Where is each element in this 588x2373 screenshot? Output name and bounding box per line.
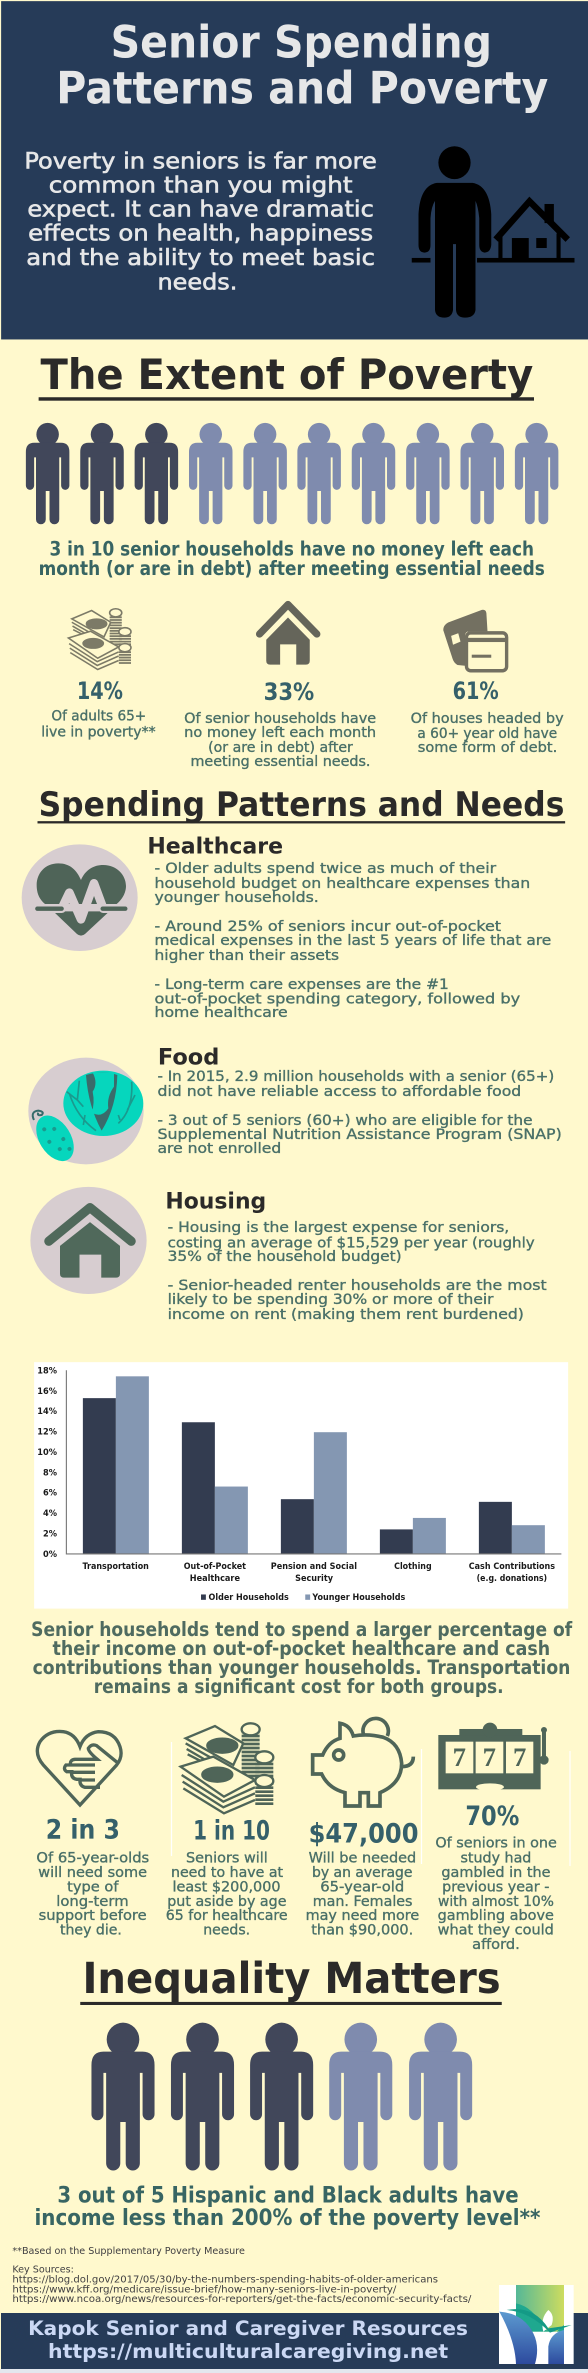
text: food: did not have reliable access to affordable food: [157, 1084, 521, 1100]
stat: $47,000: man. Females: [313, 1894, 413, 1910]
icon: money and coins: [181, 1723, 273, 1813]
panel: inequality matters: [12, 1954, 541, 2305]
stat: 2 in 3: long-term: [56, 1894, 129, 1910]
legend: [201, 1592, 405, 1602]
icon: slot machine: 7: [513, 1742, 526, 1772]
caption: 3 in 10: [39, 537, 545, 580]
icon: house in circle: [30, 1187, 147, 1294]
footnote and sources: Key Sources:: [12, 2265, 74, 2276]
legend: Older Households: [208, 1592, 289, 1602]
y axis labels: 16%: [37, 1386, 58, 1396]
text: food: are not enrolled: [157, 1141, 281, 1157]
stat: 61%: some form of debt.: [418, 740, 557, 756]
intro text: effects on health, happiness: [28, 222, 373, 247]
stat: 2 in 3: support before: [39, 1908, 147, 1924]
stat: 14%: [41, 677, 156, 741]
x axis labels: Out-of-Pocket: [184, 1561, 246, 1571]
stat: 70%: gambling above: [438, 1908, 554, 1924]
stat: 70%: [435, 1801, 557, 1953]
text: housing: 35% of the household budget): [168, 1249, 402, 1265]
text: housing: likely to be spending 30% or more of their: [168, 1292, 494, 1308]
text: healthcare: higher than their assets: [154, 948, 339, 964]
x axis labels: (e.g. donations): [477, 1573, 547, 1583]
intro text: Poverty in seniors is far more: [24, 149, 377, 174]
stat: $47,000: Will be needed: [309, 1851, 416, 1867]
stat: 33%: no money left each month: [184, 725, 376, 741]
text: food: - 3 out of 5 seniors (60+) who are eligible for the: [157, 1113, 532, 1129]
stat: 1 in 10: needs.: [203, 1922, 250, 1939]
stat: 61%: Of houses headed by: [411, 711, 564, 727]
text: healthcare: out-of-pocket spending category, followed by: [154, 991, 520, 1007]
panel: the extent of poverty: [26, 350, 564, 770]
icon: slot machine: 7: [483, 1742, 496, 1772]
text: healthcare: - Older adults spend twice as much of their: [154, 861, 496, 877]
heading: the extent of poverty: The Extent of Poverty: [40, 350, 533, 399]
footnote and sources: https://www.ncoa.org/news/resources-for-reporters/get-the-facts/economic-security-facts/: [12, 2294, 472, 2305]
stat: 2 in 3: will need some: [38, 1865, 147, 1881]
x axis labels: Healthcare: [190, 1573, 240, 1583]
stat: 14%: live in poverty**: [41, 724, 156, 741]
text: housing: - Senior-headed renter households are the most: [168, 1278, 547, 1294]
stat: 70%: with almost 10%: [438, 1894, 554, 1910]
x axis labels: Cash Contributions: [469, 1561, 555, 1571]
intro text: needs.: [157, 271, 237, 296]
text: housing: income on rent (making them rent burdened): [168, 1307, 524, 1323]
y axis labels: [37, 1365, 58, 1559]
text: healthcare: younger households.: [154, 890, 319, 906]
y axis labels: 0%: [43, 1549, 58, 1559]
footnote and sources: https://www.kff.org/medicare/issue-brief/how-many-seniors-live-in-poverty/: [12, 2284, 397, 2295]
y axis labels: 6%: [43, 1488, 58, 1498]
icon: person and house: [412, 146, 574, 318]
intro text: common than you might: [49, 173, 353, 199]
panel: header: [1, 1, 588, 339]
stat: $47,000: by an average: [312, 1865, 413, 1881]
heading: inequality matters: Inequality Matters: [83, 1954, 501, 2003]
chart summary: [31, 1618, 573, 1698]
stat: $47,000: than $90,000.: [311, 1922, 413, 1939]
footer text: [28, 2317, 468, 2363]
stat: 1 in 10: 1 in 10: [193, 1815, 270, 1847]
intro text: expect. It can have dramatic: [27, 197, 374, 223]
text: healthcare: home healthcare: [154, 1005, 288, 1021]
footer text: https://multiculturalcaregiving.net: [48, 2340, 448, 2363]
y axis labels: 2%: [43, 1529, 58, 1539]
text: healthcare: - Long-term care expenses are the #1: [154, 977, 449, 993]
stat: 33%: [184, 678, 376, 770]
footnote and sources: [12, 2246, 472, 2305]
text: healthcare: - Around 25% of seniors incur out-of-pocket: [154, 919, 502, 935]
x axis labels: Transportation: [82, 1561, 149, 1571]
x axis labels: Pension and Social: [271, 1561, 357, 1571]
stat: 2 in 3: [36, 1814, 149, 1939]
stat: 2 in 3: they die.: [60, 1922, 122, 1939]
legend: Younger Households: [311, 1592, 405, 1602]
icon: house: [260, 605, 317, 665]
intro text: [24, 149, 377, 296]
icon: Kapok logo: [499, 2285, 574, 2364]
bars: [83, 1376, 545, 1554]
caption: 3 out of 5: 3 out of 5 Hispanic and Black adults have: [57, 2183, 519, 2209]
intro text: and the ability to meet basic: [26, 246, 375, 271]
stat: 33%: Of senior households have: [184, 711, 376, 727]
text: housing: costing an average of $15,529 per year (roughly: [168, 1235, 535, 1251]
icon: heart in hand: [37, 1731, 121, 1805]
text: food: Supplemental Nutrition Assistance Program (SNAP): [157, 1127, 562, 1143]
panel: spending patterns and needs: [22, 784, 573, 1698]
stat: 1 in 10: Seniors will: [186, 1851, 268, 1867]
y axis labels: 14%: [37, 1406, 58, 1416]
y axis labels: 10%: [37, 1447, 58, 1457]
icon: slot machine: 7: [453, 1742, 466, 1772]
stat: 1 in 10: least $200,000: [173, 1879, 280, 1896]
footnote and sources: **Based on the Supplementary Poverty Measure: [12, 2246, 245, 2257]
y axis labels: 12%: [37, 1426, 58, 1437]
stat: 70%: 70%: [465, 1801, 519, 1832]
stat: 61%: 61%: [453, 677, 499, 705]
chart summary: remains a significant cost for both groups.: [94, 1675, 504, 1698]
icon: heartbeat: [22, 844, 138, 951]
x axis labels: Security: [295, 1573, 334, 1583]
bar chart: [34, 1362, 568, 1609]
icon: credit cards: [443, 610, 507, 671]
footnote and sources: https://blog.dol.gov/2017/05/30/by-the-numbers-spending-habits-of-older-americans: [12, 2275, 438, 2286]
stat: $47,000: [306, 1818, 419, 1939]
text: healthcare: Healthcare: [147, 834, 283, 859]
stat: 70%: what they could: [438, 1922, 554, 1939]
stat: $47,000: $47,000: [309, 1818, 419, 1850]
caption: 3 out of 5: income less than 200% of the poverty level**: [34, 2206, 541, 2231]
text: housing: - Housing is the largest expense for seniors,: [168, 1220, 509, 1236]
stat: 33%: 33%: [264, 678, 314, 706]
icon: piggy bank: [313, 1718, 413, 1806]
title: Patterns and Poverty: [56, 63, 548, 114]
stat: 14%: Of adults 65+: [51, 708, 146, 725]
panel: long-term costs: [36, 1718, 570, 1953]
y axis labels: 4%: [43, 1508, 58, 1518]
title: [56, 17, 548, 114]
stat: 61%: a 60+ year old have: [417, 726, 557, 742]
stat: 2 in 3: Of 65-year-olds: [36, 1851, 149, 1867]
text: food: [157, 1045, 562, 1157]
x axis labels: [82, 1561, 555, 1583]
stat: 1 in 10: put aside by age: [167, 1894, 287, 1910]
stat: 1 in 10: [166, 1815, 288, 1939]
heading: spending patterns and needs: Spending Patterns and Needs: [39, 784, 564, 824]
pictogram: 3 out of 5: [91, 2023, 472, 2170]
stat: $47,000: 65-year-old: [320, 1879, 404, 1896]
stat: 2 in 3: type of: [67, 1879, 120, 1896]
title: Senior Spending: [111, 17, 492, 69]
icon: slot machine: [438, 1723, 549, 1791]
y axis labels: 18%: [37, 1365, 58, 1375]
stat: 14%: 14%: [77, 677, 123, 705]
x axis labels: Clothing: [394, 1561, 432, 1571]
y axis labels: 8%: [43, 1467, 58, 1477]
text: food: Food: [158, 1045, 219, 1071]
text: healthcare: medical expenses in the last 5 years of life that are: [154, 933, 551, 949]
text: food: - In 2015, 2.9 million households with a senior (65+): [157, 1069, 554, 1085]
panel: footer: [0, 2285, 588, 2373]
footer text: Kapok Senior and Caregiver Resources: [28, 2317, 468, 2340]
stat: 70%: Of seniors in one: [435, 1836, 557, 1852]
icon: money: [68, 609, 131, 670]
pictogram: 3 in 10 households: [26, 423, 558, 524]
stat: 33%: (or are in debt) after: [208, 740, 353, 756]
stat: 33%: meeting essential needs.: [190, 754, 370, 770]
caption: 3 out of 5: [34, 2183, 541, 2231]
stat: 1 in 10: 65 for healthcare: [166, 1908, 288, 1924]
text: housing: Housing: [165, 1190, 266, 1215]
stat: 70%: gambled in the: [441, 1865, 550, 1881]
icon: cabbage and cucumber: [28, 1058, 144, 1168]
stat: 1 in 10: need to have at: [171, 1865, 284, 1881]
stat: 70%: study had: [460, 1851, 531, 1867]
stat: 70%: afford.: [472, 1937, 520, 1953]
text: housing: [165, 1190, 547, 1323]
stat: 61%: [411, 677, 564, 756]
stat: 2 in 3: 2 in 3: [46, 1814, 120, 1846]
text: healthcare: [147, 834, 551, 1021]
stat: 70%: previous year -: [442, 1879, 549, 1896]
text: healthcare: household budget on healthcare expenses than: [154, 876, 530, 892]
stat: $47,000: may need more: [306, 1908, 419, 1924]
